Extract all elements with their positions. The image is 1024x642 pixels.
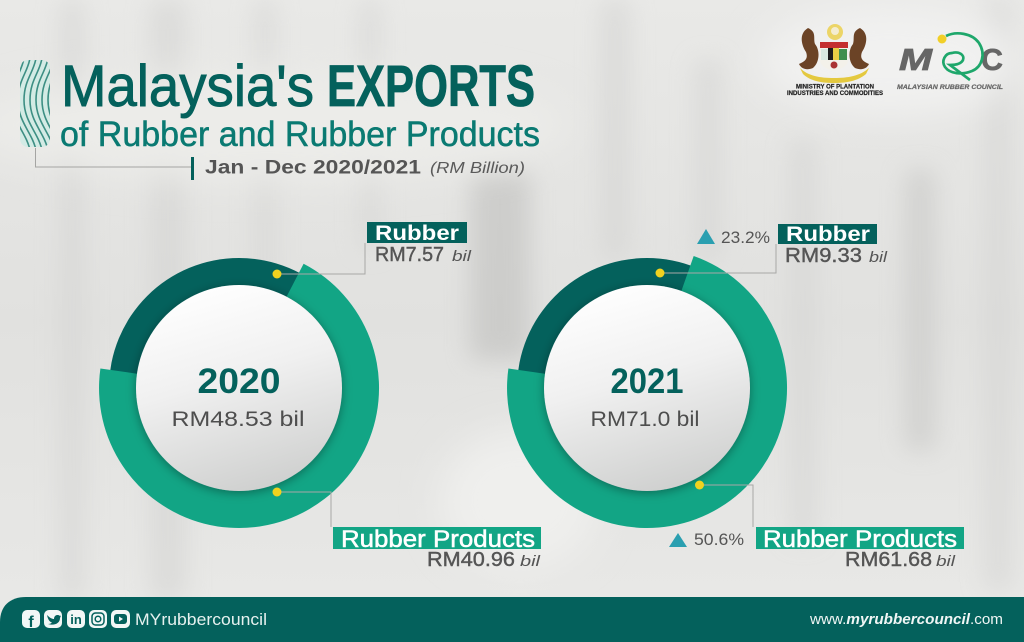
- callout: 2021 rubber: Rubber: [786, 222, 871, 246]
- subtitle unit: (RM Billion): [430, 160, 525, 177]
- callout: 2021 rubber products: bil: [936, 553, 956, 570]
- icon: linkedin: in: [70, 612, 82, 627]
- callout: 2021 rubber products: 50.6%: [694, 530, 744, 549]
- logo: Malaysian Rubber Council: M: [899, 42, 933, 77]
- footer bar: [0, 597, 1024, 642]
- 2021 total: RM71.0 bil: [590, 408, 700, 431]
- title line 2: of Rubber and Rubber Products: [60, 115, 540, 154]
- callout: 2021 rubber products: [669, 480, 964, 571]
- callout: 2020 rubber products: bil: [520, 553, 541, 570]
- icon: instagram: [89, 610, 107, 628]
- callout: 2021 rubber: bil: [869, 249, 888, 266]
- icon: wavy rubber stripes: [20, 60, 50, 147]
- logo text: ministry: INDUSTRIES AND COMMODITIES: [787, 90, 884, 97]
- logo text: ministry: MINISTRY OF PLANTATION: [796, 84, 874, 90]
- callout: 2021 rubber products: Rubber Products: [763, 526, 957, 553]
- callout: 2021 rubber: [656, 222, 888, 278]
- callout: 2021 rubber: 23.2%: [721, 228, 770, 247]
- title line 1: Malaysia's: [61, 54, 314, 119]
- donut chart 2020: [99, 258, 379, 528]
- callout: 2020 rubber: [272, 221, 472, 278]
- icon: facebook: [22, 610, 40, 631]
- donut chart 2021: [507, 256, 787, 528]
- callout: 2020 rubber products: Rubber Products: [341, 526, 535, 553]
- callout: 2020 rubber: RM7.57: [375, 244, 444, 266]
- subtitle: Jan - Dec 2020/2021: [205, 158, 422, 178]
- callout: 2020 rubber: bil: [452, 248, 472, 265]
- connector line under title: [36, 148, 192, 167]
- social handle: MYrubbercouncil: [135, 611, 267, 629]
- callout: 2020 rubber products: [272, 488, 541, 571]
- title line 1 emphasis: EXPORTS: [327, 54, 535, 119]
- callout: 2021 rubber: RM9.33: [785, 245, 862, 267]
- 2020 total: RM48.53 bil: [172, 408, 304, 431]
- 2021 year: 2021: [610, 362, 684, 401]
- logo text: council: MALAYSIAN RUBBER COUNCIL: [897, 84, 1003, 91]
- icon: facebook: f: [28, 614, 34, 631]
- subtitle accent bar: [191, 157, 194, 180]
- callout: 2021 rubber products: RM61.68: [845, 549, 932, 571]
- icon: twitter: [44, 610, 62, 628]
- logo: Malaysian Rubber Council: [897, 33, 1003, 91]
- icon: linkedin: [67, 610, 85, 628]
- 2020 year: 2020: [198, 362, 280, 401]
- website: www.myrubbercouncil .com: [809, 612, 1003, 628]
- logo: Malaysian Rubber Council: C: [981, 42, 1003, 77]
- callout: 2020 rubber: Rubber: [375, 221, 460, 245]
- callout: 2020 rubber products: RM40.96: [427, 549, 515, 571]
- icon: youtube: [111, 610, 130, 628]
- logo: ministry crest: [787, 24, 884, 97]
